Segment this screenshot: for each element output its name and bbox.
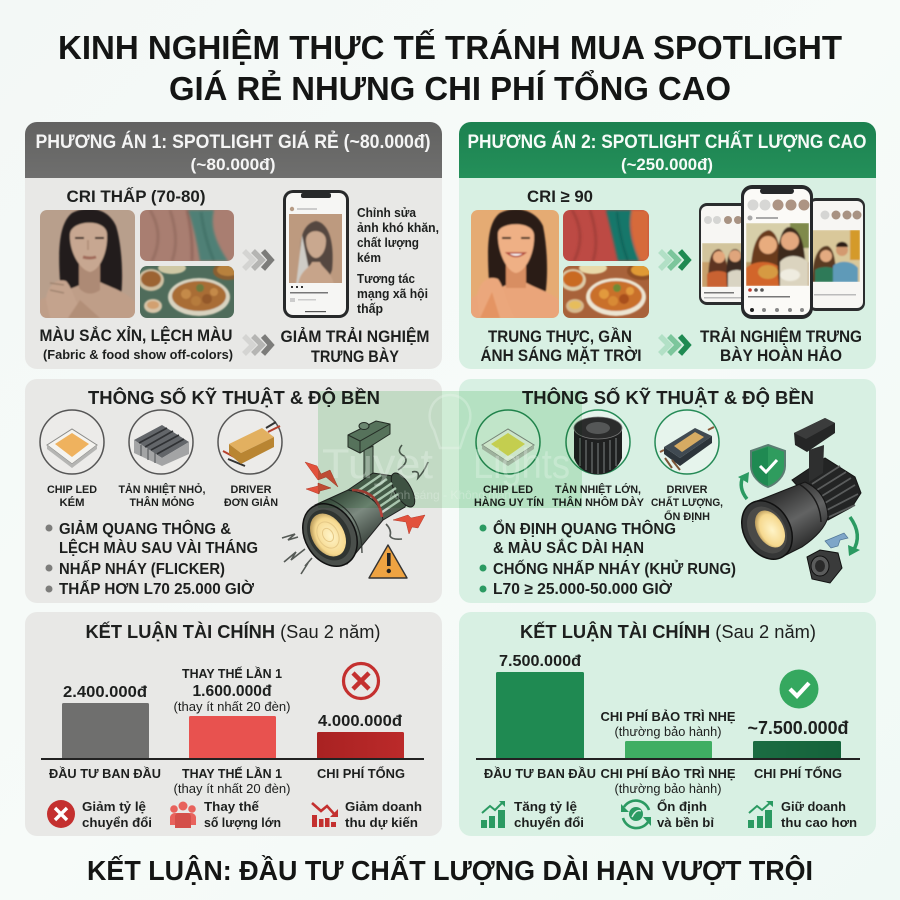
icon: nut and clip (807, 533, 848, 583)
panel: option 1 cheap spotlight (25, 122, 442, 369)
track adapter and stem (348, 421, 390, 482)
lens (292, 494, 368, 576)
labels: components (474, 483, 723, 523)
photo: woman under high CRI (471, 209, 559, 318)
axis labels: ĐẦU TƯ BAN ĐẦU (49, 766, 161, 781)
caption: perfect display experience (700, 327, 862, 365)
title: KINH NGHIỆM THỰC TẾ TRÁNH MUA SPOTLIGHT (58, 29, 843, 67)
caption: reduced display experience (280, 327, 430, 366)
fins (348, 470, 419, 520)
photo: food under high CRI (563, 266, 649, 318)
labels: components: DRIVER (666, 484, 708, 496)
value: maintenance (600, 709, 736, 739)
option 2 header: (~250.000đ) (621, 155, 713, 174)
labels: components: ĐƠN GIẢN (224, 496, 278, 509)
arrow: green curved down (848, 517, 860, 556)
barrel (752, 482, 828, 557)
photo: fabric under low CRI (140, 210, 234, 261)
caption: true colours: TRUNG THỰC, GẦN (488, 327, 632, 346)
impact: stable and durable (621, 799, 714, 830)
impact: bulk replacement (170, 799, 281, 830)
bullet list: quality benefits: & MÀU SẮC DÀI HẠN (493, 539, 644, 557)
option 1 header (25, 122, 442, 178)
labels: components: HÀNG UY TÍN (474, 496, 544, 509)
phone: left (699, 203, 741, 305)
panel: specs cheap (25, 379, 442, 603)
panel: specs quality (459, 379, 876, 603)
caption: off colours: MÀU SẮC XỈN, LỆCH MÀU (40, 326, 232, 345)
text: low social engagement: Tương tác (357, 271, 415, 286)
text: photo editing problem (357, 205, 439, 265)
icon: large heat sink (566, 410, 630, 474)
bullet list: cheap problems: THẤP HƠN L70 25.000 GIỜ (59, 580, 255, 598)
text: low social engagement: mạng xã hội (357, 286, 428, 301)
icon: weak LED chip (40, 410, 104, 474)
option 2 header (459, 122, 876, 178)
bullet list: quality benefits: ỔN ĐỊNH QUANG THÔNG (493, 520, 676, 538)
icon: red X (344, 664, 378, 698)
labels: components: CHIP LED (483, 484, 533, 496)
photo: woman under low CRI (40, 209, 135, 318)
impact: stable and durable: và bền bỉ (657, 815, 714, 830)
phone: centre (741, 185, 813, 319)
impact: revenue kept: Giữ doanh (781, 799, 846, 814)
bullet list: cheap problems (46, 520, 258, 598)
labels: components: CHẤT LƯỢNG, (651, 496, 723, 509)
fins (792, 458, 861, 520)
option 1 header: PHƯƠNG ÁN 1: SPOTLIGHT GIÁ RẺ (~80.000đ) (36, 130, 430, 153)
value: replacement: (thay ít nhất 20 đèn) (174, 700, 290, 714)
title (58, 29, 843, 108)
watermark: Ánh sáng - Không gian (389, 487, 511, 502)
arrows: grey chevrons lower (244, 336, 271, 354)
icon: dark flicker bolts (282, 445, 428, 574)
specs heading: THÔNG SỐ KỸ THUẬT & ĐỘ BỀN (88, 387, 380, 408)
caption: reduced display experience: TRƯNG BÀY (311, 347, 399, 366)
labels: components: THÂN NHÔM DÀY (552, 496, 645, 509)
impact: conversion drop: chuyển đổi (82, 815, 152, 830)
impact: conversion rise (481, 799, 584, 830)
value: replacement: THAY THẾ LẦN 1 (182, 666, 282, 681)
text: photo editing problem: Chỉnh sửa (357, 205, 417, 220)
illustration: quality spotlight (732, 418, 861, 583)
impact: revenue drop: thu dự kiến (345, 815, 418, 830)
phone: low engagement post (283, 190, 349, 318)
labels: components: KÉM (60, 496, 84, 509)
labels: components: TẢN NHIỆT NHỎ, (118, 483, 206, 496)
text: photo editing problem: chất lượng (357, 235, 419, 250)
bullet list: cheap problems: NHẤP NHÁY (FLICKER) (59, 561, 225, 578)
text: photo editing problem: ảnh khó khăn, (357, 220, 439, 235)
labels: components: TẢN NHIỆT LỚN, (555, 483, 641, 496)
icon: warning triangle (369, 545, 407, 578)
value: initial: 7.500.000đ (499, 653, 581, 670)
axis labels (49, 766, 405, 796)
icon: quality driver (655, 410, 719, 474)
track adapter and stem (794, 418, 835, 482)
axis labels: CHI PHÍ TỔNG (317, 766, 405, 781)
arrows: grey chevrons (244, 251, 271, 269)
panel: financial conclusion quality (459, 612, 876, 836)
conclusion footer: KẾT LUẬN: ĐẦU TƯ CHẤT LƯỢNG DÀI HẠN VƯỢT TRỘI (87, 854, 813, 886)
watermark: Tuyet (322, 440, 433, 487)
impact: bulk replacement: số lượng lớn (204, 815, 281, 830)
value: replacement: 1.600.000đ (192, 683, 272, 700)
title: GIÁ RẺ NHƯNG CHI PHÍ TỔNG CAO (169, 70, 731, 108)
icon: green shield (751, 445, 785, 487)
axis labels: (thường bảo hành) (614, 782, 722, 796)
caption: reduced display experience: GIẢM TRẢI NGHIỆM (280, 327, 430, 346)
phones: high engagement posts (699, 185, 865, 319)
icon: branded LED chip (476, 410, 540, 474)
axis labels: (thay ít nhất 20 đèn) (174, 782, 290, 796)
caption: true colours: ÁNH SÁNG MẶT TRỜI (480, 346, 642, 365)
bar chart: cheap costs (41, 664, 424, 796)
text: low social engagement: thấp (357, 301, 383, 316)
value: replacement (174, 666, 290, 714)
lens (732, 492, 802, 568)
axis labels: ĐẦU TƯ BAN ĐẦU (484, 766, 596, 781)
labels: components: DRIVER (230, 484, 272, 496)
axis labels: CHI PHÍ BẢO TRÌ NHẸ (600, 766, 736, 781)
impact: conversion rise: Tăng tỷ lệ (514, 799, 577, 814)
value: total: 4.000.000đ (318, 713, 402, 730)
bullet list: quality benefits (480, 520, 736, 598)
specs heading: THÔNG SỐ KỸ THUẬT & ĐỘ BỀN (522, 387, 814, 408)
caption: off colours (40, 326, 233, 362)
impact: revenue kept (748, 799, 857, 830)
illustration: failing spotlight (282, 421, 428, 578)
impact: revenue drop: Giảm doanh (345, 799, 422, 814)
bullet list: quality benefits: CHỐNG NHẤP NHÁY (KHỬ RUNG) (493, 560, 736, 578)
bullet list: cheap problems: GIẢM QUANG THÔNG & (59, 520, 231, 538)
arrow: green curved up (738, 472, 749, 499)
impact: bulk replacement: Thay thế (204, 799, 260, 814)
value: maintenance: (thường bảo hành) (614, 725, 722, 739)
caption: true colours (480, 327, 642, 365)
caption: perfect display experience: BÀY HOÀN HẢO (720, 346, 842, 365)
labels: components: ỔN ĐỊNH (664, 510, 710, 523)
value: total: ~7.500.000đ (748, 718, 848, 738)
option 1 header: (~80.000đ) (190, 155, 276, 174)
phone: right (808, 198, 865, 311)
impact: conversion rise: chuyển đổi (514, 815, 584, 830)
text: photo editing problem: kém (357, 250, 381, 265)
labels: components (47, 483, 278, 509)
impact: conversion drop: Giảm tỷ lệ (82, 799, 146, 814)
caption: off colours: (Fabric & food show off-colors) (43, 348, 233, 362)
bullet list: quality benefits: L70 ≥ 25.000-50.000 GIỜ (493, 580, 673, 598)
barrel (315, 490, 383, 564)
bullet list: cheap problems: LỆCH MÀU SAU VÀI THÁNG (59, 539, 258, 557)
icon: simple driver (218, 410, 282, 474)
icon: green check (780, 670, 818, 708)
text: low social engagement (357, 271, 428, 316)
bar chart: quality costs (476, 653, 860, 796)
value: initial: 2.400.000đ (63, 684, 147, 701)
axis labels: CHI PHÍ TỔNG (754, 766, 842, 781)
labels: components: THÂN MỎNG (130, 496, 194, 509)
axis labels (484, 766, 842, 796)
labels: components: CHIP LED (47, 484, 97, 496)
financial heading: KẾT LUẬN TÀI CHÍNH (Sau 2 năm) (520, 621, 816, 642)
icon: red sparks (305, 462, 425, 534)
icon: small heat sink (129, 410, 193, 474)
value: maintenance: CHI PHÍ BẢO TRÌ NHẸ (600, 709, 736, 724)
CRI low label: CRI THẤP (70-80) (66, 187, 206, 206)
arrows: green chevrons (660, 251, 688, 269)
arrows: green chevrons lower (660, 336, 688, 354)
watermark (318, 391, 582, 508)
CRI high label: CRI ≥ 90 (527, 187, 593, 206)
impact: stable and durable: Ổn định (657, 799, 707, 814)
impact: conversion drop (47, 799, 152, 830)
photo: food under low CRI (140, 266, 234, 318)
watermark: Lights (473, 440, 570, 487)
panel: financial conclusion cheap (25, 612, 442, 836)
axis labels: THAY THẾ LẦN 1 (182, 766, 282, 781)
caption: perfect display experience: TRẢI NGHIỆM TRƯNG (700, 327, 862, 346)
impact: revenue kept: thu cao hơn (781, 815, 857, 830)
photo: fabric under high CRI (563, 210, 649, 261)
impact: revenue drop (312, 799, 422, 830)
panel: option 2 quality spotlight (459, 122, 876, 369)
financial heading: KẾT LUẬN TÀI CHÍNH (Sau 2 năm) (86, 621, 381, 642)
